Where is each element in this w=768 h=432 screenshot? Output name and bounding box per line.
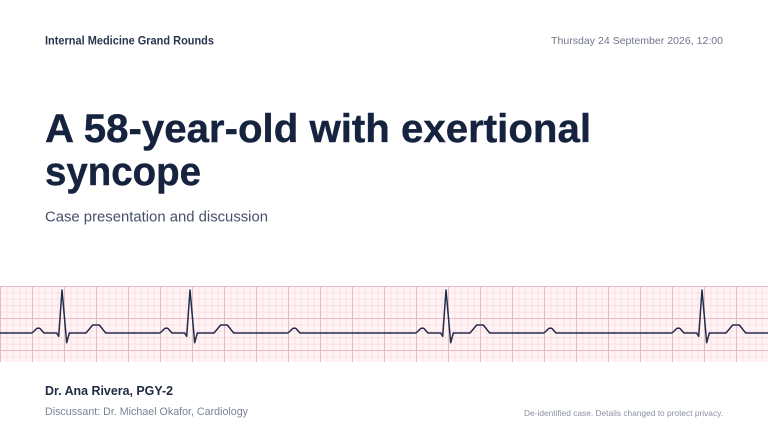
ECG trace [0, 290, 768, 343]
presenter: Dr. Ana Rivera, PGY-2 [45, 383, 173, 398]
subtitle: Case presentation and discussion [45, 208, 268, 226]
ECG grid paper [0, 286, 768, 362]
event label: Internal Medicine Grand Rounds [45, 34, 214, 48]
privacy note: De-identified case. Details changed to protect privacy. [524, 408, 723, 418]
discussant: Discussant: Dr. Michael Okafor, Cardiology [45, 406, 248, 418]
title: syncope [45, 150, 201, 194]
date and time: Thursday 24 September 2026, 12:00 [551, 35, 723, 47]
ECG strip [0, 286, 768, 362]
title: A 58-year-old with exertional [45, 107, 591, 151]
title [45, 107, 591, 194]
